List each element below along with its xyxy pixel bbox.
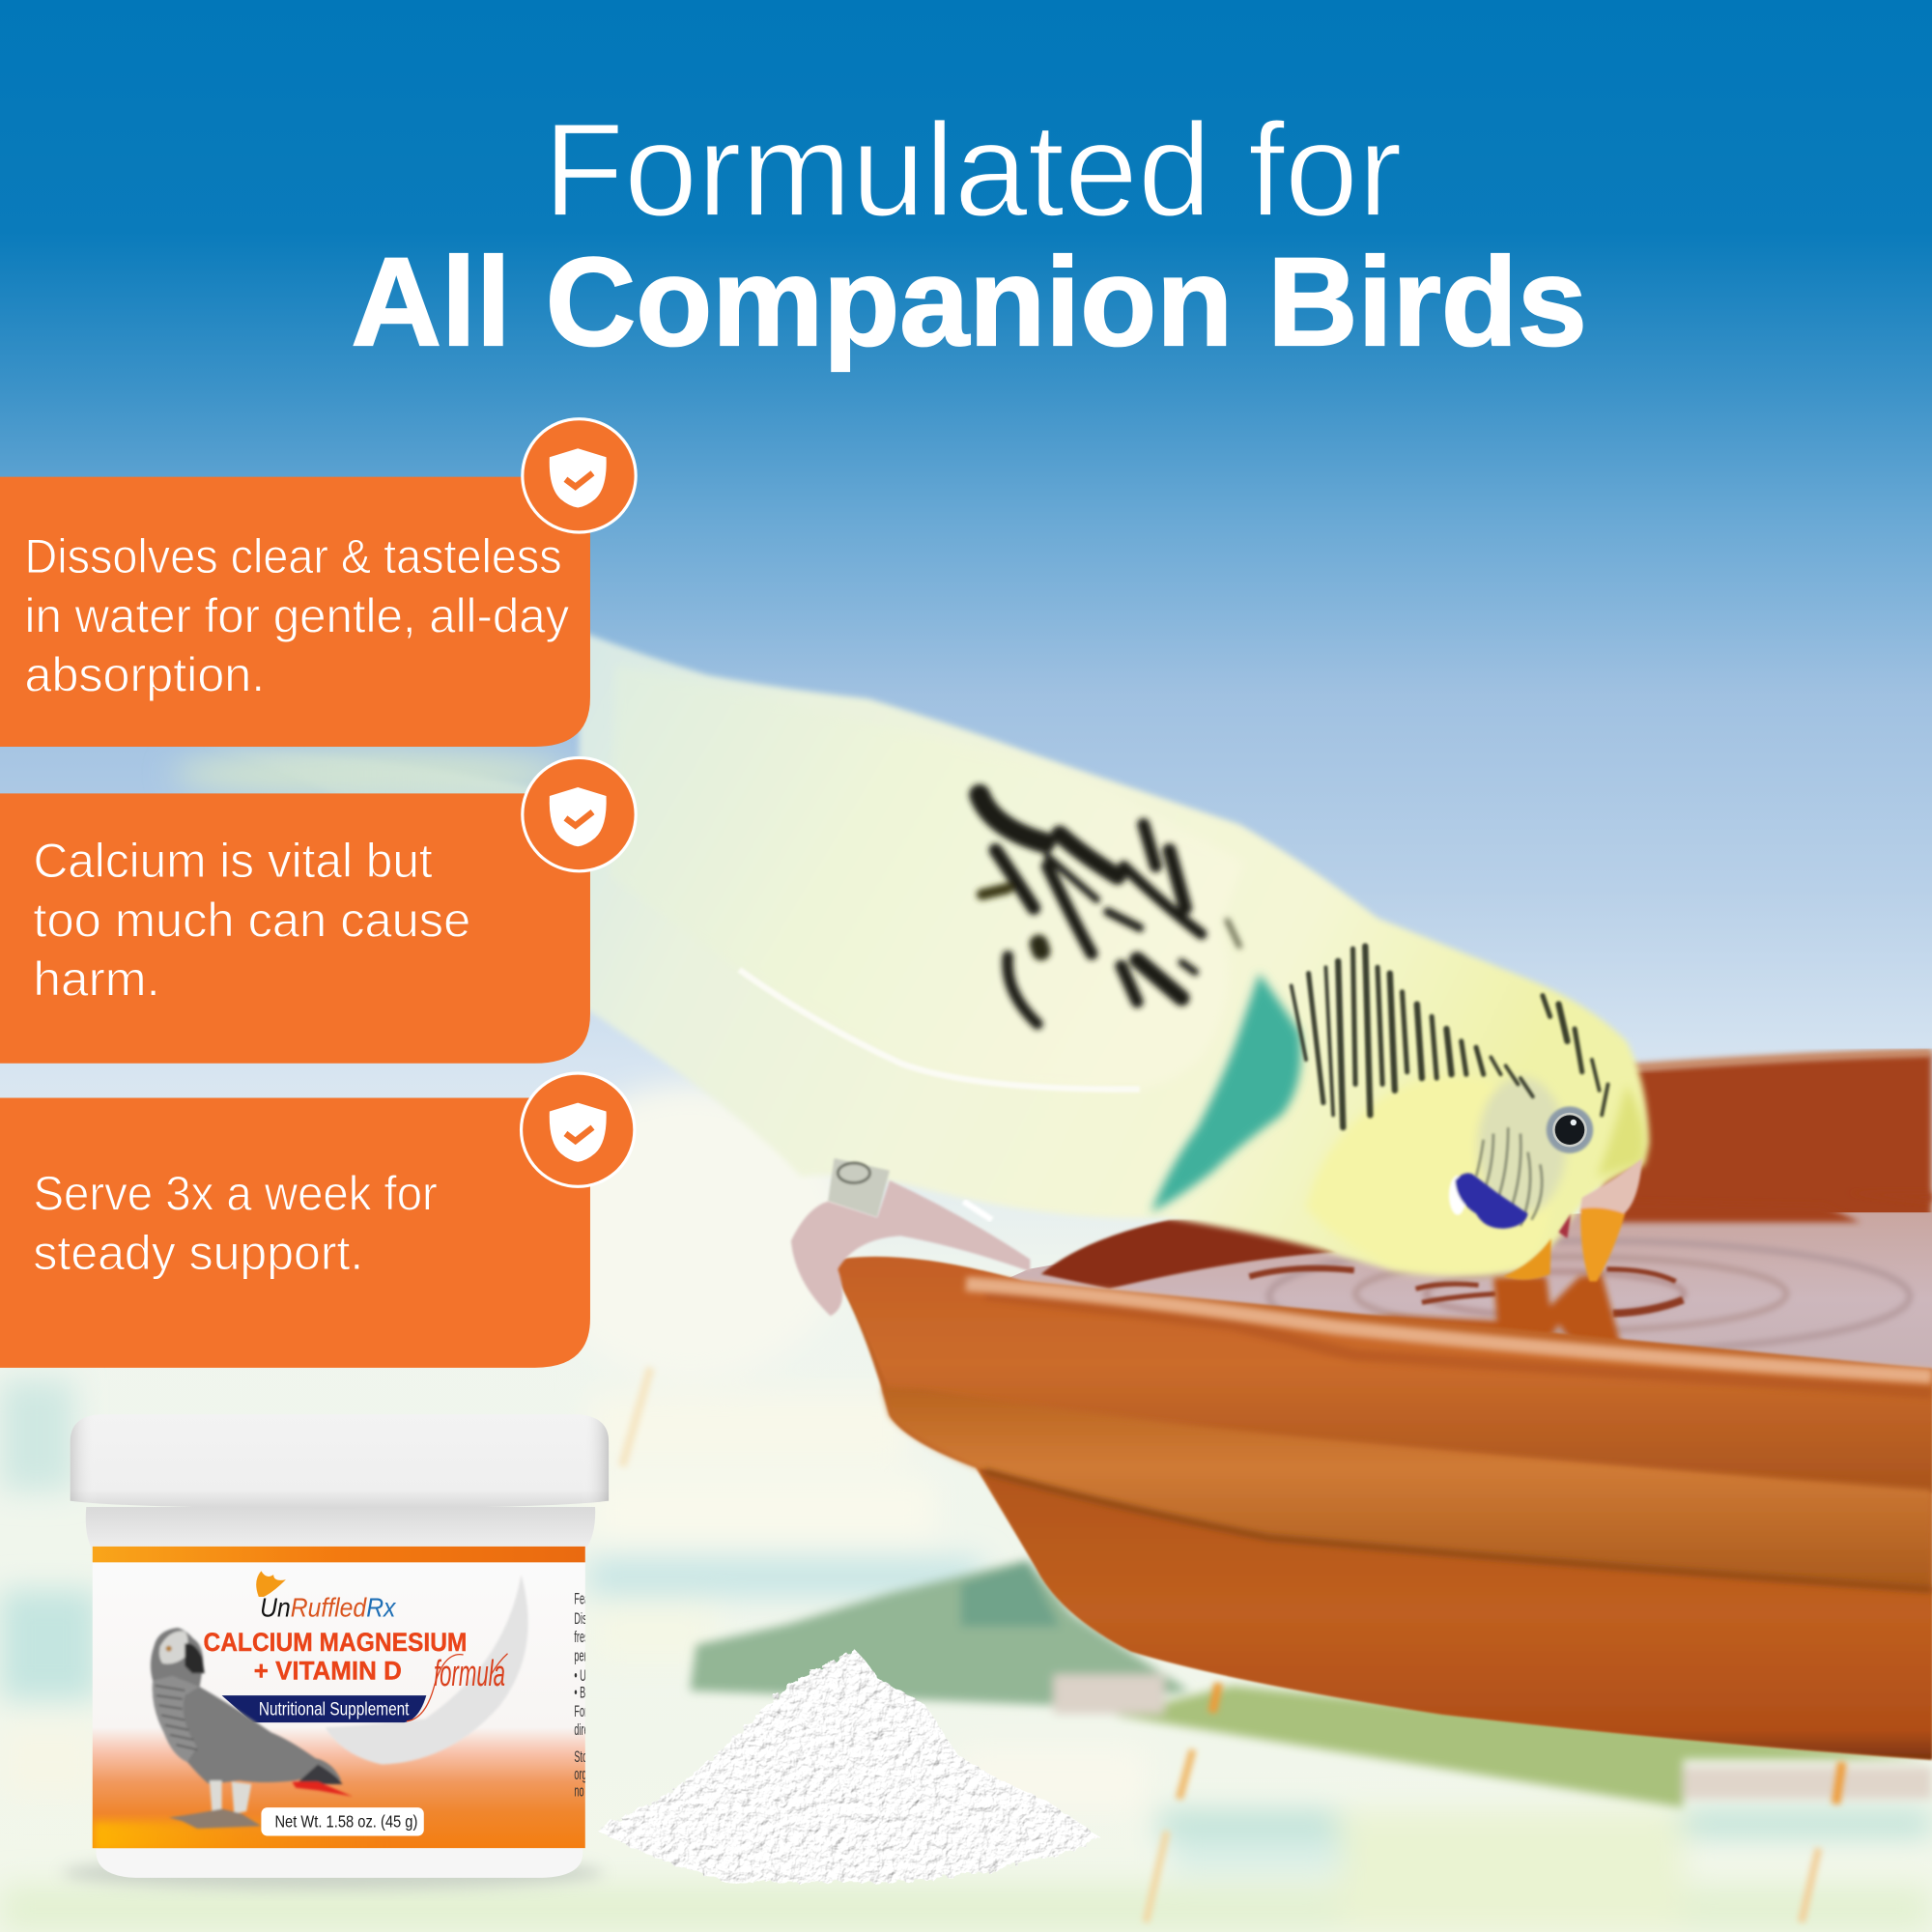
feather — [326, 1575, 528, 1765]
budgie wing lower edge — [739, 970, 1140, 1090]
bird drinking water illustration — [197, 631, 1932, 1759]
powder pile — [596, 1650, 1100, 1882]
icon: shield check 2 — [523, 757, 636, 871]
title line 2: All Companion Birds — [352, 231, 1587, 372]
budgie foot — [791, 1180, 1030, 1316]
card 2 text: too much can cause — [33, 893, 470, 947]
foot claw highlights — [963, 1202, 992, 1220]
formula script — [407, 1653, 508, 1721]
water surface — [974, 1212, 1932, 1386]
middle band — [882, 1387, 1932, 1589]
card 1 text: absorption. — [25, 648, 265, 702]
card 2 text — [33, 834, 470, 1007]
beak reflection — [1328, 1274, 1622, 1348]
title line 1: Formulated for — [543, 96, 1403, 244]
front rim — [828, 1258, 1932, 1493]
jar yellow glow — [93, 1817, 342, 1849]
side panel text: direct — [574, 1720, 596, 1739]
side panel text: • Bo — [574, 1684, 590, 1701]
side panel text: • Ug — [574, 1666, 591, 1685]
panel: card 1 — [0, 477, 590, 747]
icon: shield check 3 — [522, 1073, 635, 1186]
jar lid — [71, 1414, 609, 1508]
water ripples — [1269, 1240, 1910, 1351]
budgie eye — [1547, 1106, 1593, 1153]
icon: shield check 1 — [523, 419, 636, 532]
side panel text — [574, 1593, 585, 1797]
budgie beak — [1503, 1158, 1642, 1282]
brand logo — [256, 1571, 396, 1622]
clay water bowl — [828, 1052, 1932, 1759]
side panel text: Store — [574, 1747, 595, 1766]
side panel text: Dissolves — [574, 1609, 612, 1628]
formula script: formula — [434, 1653, 505, 1694]
parrot — [151, 1628, 353, 1829]
card 3 text: Serve 3x a week for — [33, 1167, 438, 1221]
title — [352, 96, 1587, 372]
nutritional supplement banner: Nutritional Supplement — [259, 1700, 410, 1720]
far rim — [1602, 1054, 1932, 1226]
far rim reflection — [1602, 1193, 1932, 1222]
product jar — [62, 1414, 612, 1890]
product name: CALCIUM MAGNESIUM — [203, 1628, 467, 1657]
jar label — [93, 1547, 612, 1853]
net weight tag — [261, 1807, 424, 1836]
brand logo: UnRuffledRx — [260, 1592, 396, 1622]
card 1 text: in water for gentle, all-day — [25, 588, 569, 642]
budgie leg ring — [828, 1158, 890, 1217]
bowl groove — [984, 1471, 1932, 1589]
budgie neck stripes — [1292, 947, 1608, 1127]
card 3 text: steady support. — [33, 1226, 363, 1280]
side panel text: Features — [574, 1590, 610, 1607]
side panel text: no — [574, 1782, 584, 1800]
rim blotches — [985, 1293, 1932, 1392]
jar body — [86, 1507, 595, 1878]
net weight tag: Net Wt. 1.58 oz. (45 g) — [274, 1812, 417, 1832]
side panel text: fresh — [574, 1628, 594, 1646]
budgie blue cheek spot — [1449, 1173, 1528, 1229]
card 1 text: Dissolves clear & tasteless — [25, 529, 562, 583]
shaded water under bird — [1041, 1219, 1337, 1289]
product name line 2: + VITAMIN D — [254, 1657, 402, 1686]
panel: card 3 — [0, 1097, 590, 1368]
card 2 text: Calcium is vital but — [33, 834, 433, 888]
jar top orange band — [93, 1547, 585, 1562]
background: blurred tablecloth — [0, 750, 1932, 1932]
rim pale lip — [966, 1284, 1932, 1377]
budgie body — [579, 631, 1649, 1273]
lower bowl — [980, 1468, 1932, 1759]
dark ripple arcs — [1249, 1268, 1683, 1314]
budgie wing black markings — [980, 795, 1239, 1024]
nutritional supplement banner — [222, 1695, 426, 1722]
side panel text: organ — [574, 1765, 597, 1783]
side panel text: per — [574, 1647, 587, 1664]
budgie tail — [197, 653, 788, 1109]
budgie cheek and neck — [1306, 1076, 1645, 1275]
card 2 text: harm. — [33, 952, 160, 1007]
budgie wing — [611, 666, 1244, 1090]
bowl base shape — [828, 1258, 1932, 1759]
card 3 text — [33, 1167, 438, 1280]
side panel text: For — [574, 1702, 587, 1720]
panel: card 2 — [0, 793, 590, 1064]
card 1 text — [25, 529, 569, 702]
budgie teal chest patch — [1151, 974, 1301, 1212]
budgie cheek fine stripes — [1476, 1127, 1542, 1226]
